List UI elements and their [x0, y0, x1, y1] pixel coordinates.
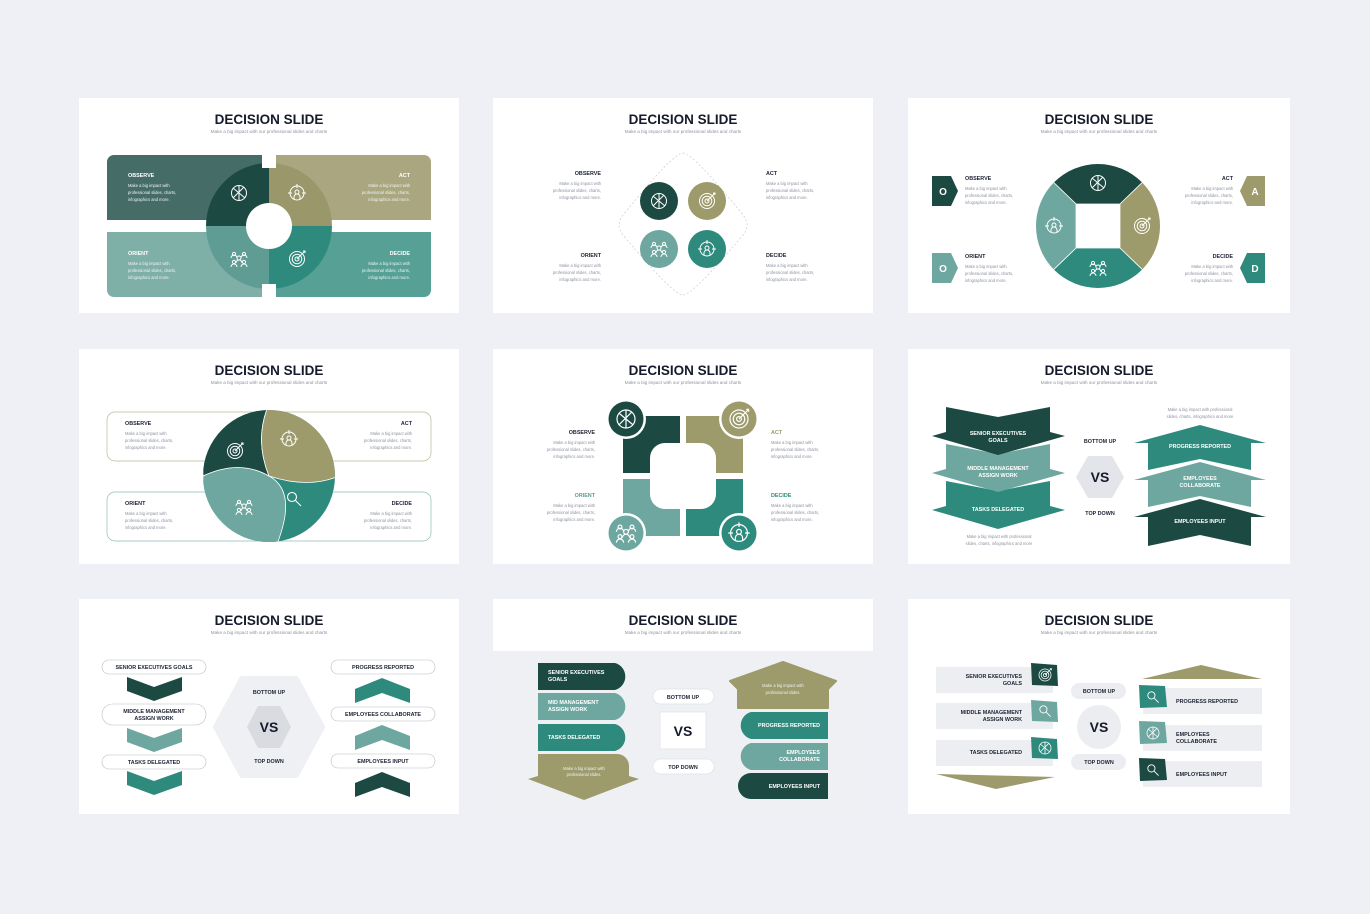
text: observe: [965, 176, 1013, 205]
panel: observe box: Make a big impact with: [128, 183, 170, 188]
left down chevrons: ASSIGN WORK: [978, 473, 1018, 479]
text: act: Make a big impact with: [370, 431, 413, 436]
outline boxes: [107, 412, 431, 541]
left stack: TASKS DELEGATED: [548, 735, 600, 741]
left boxes: GOALS: [1003, 681, 1022, 687]
vs hexagons: TOP DOWN: [254, 759, 284, 765]
text: orient: professional slides, charts,: [547, 510, 595, 515]
right up arrows: EMPLOYEES INPUT: [1174, 519, 1226, 525]
left pills: [102, 660, 206, 769]
text: act: infographics and more.: [771, 454, 813, 459]
dashed diamond: [619, 153, 747, 295]
tag: O orient: [932, 253, 958, 283]
text: decide: Make a big impact with: [771, 503, 813, 508]
panel: act box: ACT: [399, 173, 411, 179]
text: decide: professional slides, charts,: [1185, 271, 1233, 276]
vs center: [1071, 683, 1126, 770]
slide 8: boxes with arrows: [493, 599, 873, 814]
subtitle: Make a big impact with our professional slides and charts: [1041, 630, 1158, 635]
text: decide: DECIDE: [766, 253, 787, 259]
text: observe: Make a big impact with: [125, 431, 167, 436]
panel: observe box: professional slides, charts,: [128, 190, 176, 195]
text: decide: DECIDE: [1213, 254, 1233, 260]
text: left note: slides, charts, infographics and more: [966, 541, 1033, 546]
text: observe: [125, 421, 173, 450]
left stack: MID MANAGEMENT: [548, 700, 599, 706]
slide 5: square frame: [493, 349, 873, 564]
right labels and chevrons: PROGRESS REPORTED: [352, 665, 414, 671]
text: act: [766, 171, 814, 200]
text: act: professional slides, charts,: [766, 188, 814, 193]
subtitle: Make a big impact with our professional slides and charts: [625, 129, 742, 134]
text: orient: infographics and more.: [559, 277, 601, 282]
text: act: Make a big impact with: [771, 440, 813, 445]
text: orient: Make a big impact with: [559, 263, 602, 268]
right stack: EMPLOYEES: [786, 750, 820, 756]
panel: observe box: OBSERVE: [128, 173, 155, 179]
text: observe: infographics and more.: [559, 195, 601, 200]
text: act: [1185, 176, 1234, 205]
text: decide: infographics and more.: [1191, 278, 1233, 283]
vs center: VS: [1090, 719, 1108, 735]
text: decide: [364, 501, 413, 530]
left labels and chevrons: ASSIGN WORK: [134, 716, 174, 722]
left boxes: MIDDLE MANAGEMENT: [961, 710, 1023, 716]
text: act: [364, 421, 413, 450]
title: DECISION SLIDE: [215, 112, 323, 127]
tag: A: A: [1251, 187, 1259, 198]
vs center: [653, 689, 714, 774]
icons: [1045, 176, 1150, 276]
icon circles: [640, 182, 726, 268]
text: observe: OBSERVE: [575, 171, 601, 177]
subtitle: Make a big impact with our professional slides and charts: [211, 129, 328, 134]
text: observe: professional slides, charts,: [547, 447, 595, 452]
left down chevrons: TASKS DELEGATED: [972, 507, 1024, 513]
vs center: VS: [674, 723, 692, 739]
text: observe: OBSERVE: [569, 430, 595, 436]
text: decide: [766, 253, 814, 282]
left down chevrons: MIDDLE MANAGEMENT: [967, 466, 1029, 472]
panel: observe box: infographics and more.: [128, 197, 170, 202]
vs center: TOP DOWN: [668, 765, 698, 771]
text: right note: slides, charts, infographics and more: [1167, 414, 1234, 419]
text: observe: infographics and more.: [125, 445, 167, 450]
title: DECISION SLIDE: [629, 112, 737, 127]
vs hexagons: [216, 679, 322, 775]
text: decide: professional slides, charts,: [766, 270, 814, 275]
left stack: [528, 663, 639, 800]
title: DECISION SLIDE: [629, 363, 737, 378]
panel: decide box: [276, 232, 431, 297]
panel: act box: professional slides, charts,: [362, 190, 410, 195]
vs hexagons: VS: [260, 719, 278, 735]
text: act: professional slides, charts,: [771, 447, 819, 452]
text: observe: [547, 430, 596, 459]
right boxes: PROGRESS REPORTED: [1176, 699, 1238, 705]
text: decide: Make a big impact with: [1191, 264, 1234, 269]
text: act: ACT: [401, 421, 413, 427]
text: observe: infographics and more.: [553, 454, 595, 459]
title: DECISION SLIDE: [1045, 112, 1153, 127]
tag: O: [932, 176, 958, 206]
left stack: GOALS: [548, 677, 568, 683]
text: decide: [771, 493, 819, 522]
title: DECISION SLIDE: [629, 613, 737, 628]
left labels and chevrons: MIDDLE MANAGEMENT: [123, 709, 185, 715]
subtitle: Make a big impact with our professional slides and charts: [211, 380, 328, 385]
text: decide: professional slides, charts,: [364, 518, 412, 523]
right stack: COLLABORATE: [779, 757, 820, 763]
text: orient: infographics and more.: [965, 278, 1007, 283]
text: right note: Make a big impact with professional: [1168, 407, 1233, 412]
title: DECISION SLIDE: [215, 613, 323, 628]
right boxes: COLLABORATE: [1176, 739, 1217, 745]
text: orient: ORIENT: [575, 493, 596, 499]
text: orient: Make a big impact with: [553, 503, 596, 508]
text: decide: [1185, 254, 1234, 283]
left labels and chevrons: [116, 665, 193, 795]
right stack: Make a big impact with: [762, 683, 805, 688]
subtitle: Make a big impact with our professional slides and charts: [1041, 380, 1158, 385]
panel: act box: Make a big impact with: [368, 183, 411, 188]
panel: decide box: DECIDE: [390, 251, 410, 257]
subtitle: Make a big impact with our professional slides and charts: [211, 630, 328, 635]
panel: act box: [276, 155, 431, 220]
text: act: infographics and more.: [766, 195, 808, 200]
slide 1: quadrant ring: [79, 98, 459, 313]
text: observe: Make a big impact with: [965, 186, 1007, 191]
left boxes: ASSIGN WORK: [983, 717, 1022, 723]
text: orient: [965, 254, 1013, 283]
vs center: TOP DOWN: [1084, 760, 1114, 766]
panel: decide box: Make a big impact with: [368, 261, 411, 266]
tag: O: O: [939, 187, 947, 198]
left stack: ASSIGN WORK: [548, 707, 587, 713]
right stack: PROGRESS REPORTED: [758, 723, 820, 729]
text: act: infographics and more.: [1191, 200, 1233, 205]
text: observe: professional slides, charts,: [965, 193, 1013, 198]
text: act: ACT: [771, 430, 783, 436]
left boxes: SENIOR EXECUTIVES: [966, 674, 1022, 680]
text: orient: ORIENT: [581, 253, 602, 259]
left stack: SENIOR EXECUTIVES: [548, 670, 605, 676]
text: decide: DECIDE: [392, 501, 412, 507]
left boxes: TASKS DELEGATED: [970, 750, 1022, 756]
subtitle: Make a big impact with our professional slides and charts: [1041, 129, 1158, 134]
text: observe: professional slides, charts,: [125, 438, 173, 443]
text: orient: professional slides, charts,: [553, 270, 601, 275]
tag: O orient: O: [939, 264, 947, 275]
left labels and chevrons: TASKS DELEGATED: [128, 760, 180, 766]
chart: ring: [206, 155, 332, 297]
vs hexagon: VS: [1091, 469, 1109, 485]
panel: act box: infographics and more.: [368, 197, 410, 202]
right stack: professional slides.: [766, 690, 800, 695]
slide 6: chevron stacks: [908, 349, 1290, 564]
panel: orient box: infographics and more.: [128, 275, 170, 280]
tag: A: [1240, 176, 1265, 206]
panel: decide box: professional slides, charts,: [362, 268, 410, 273]
title: DECISION SLIDE: [1045, 363, 1153, 378]
panel: orient box: [107, 232, 262, 297]
panel: orient box: Make a big impact with: [128, 261, 170, 266]
text: observe: Make a big impact with: [553, 440, 596, 445]
text: decide: Make a big impact with: [766, 263, 808, 268]
slide 2: four circles: [493, 98, 873, 313]
panel: observe box: [107, 155, 262, 220]
panel: decide box: infographics and more.: [368, 275, 410, 280]
text: decide: infographics and more.: [370, 525, 412, 530]
vs hexagon: TOP DOWN: [1085, 511, 1115, 517]
left labels and chevrons: SENIOR EXECUTIVES GOALS: [116, 665, 193, 671]
right boxes: EMPLOYEES: [1176, 732, 1210, 738]
left down chevrons: GOALS: [988, 438, 1008, 444]
right boxes: [1139, 665, 1262, 787]
text: orient: ORIENT: [125, 501, 146, 507]
subtitle: Make a big impact with our professional slides and charts: [625, 630, 742, 635]
slide 9: grey boxes with icons: [908, 599, 1290, 814]
text: act: infographics and more.: [370, 445, 412, 450]
text: observe: OBSERVE: [965, 176, 992, 182]
chart: frame pieces: [606, 399, 759, 553]
text: observe: professional slides, charts,: [553, 188, 601, 193]
icons: [228, 430, 301, 515]
text: orient: professional slides, charts,: [125, 518, 173, 523]
text: observe: infographics and more.: [965, 200, 1007, 205]
text: decide: DECIDE: [771, 493, 792, 499]
vs center: BOTTOM UP: [667, 695, 700, 701]
left down chevrons: [932, 407, 1065, 529]
panel: orient box: ORIENT: [128, 251, 149, 257]
left boxes: [936, 663, 1058, 789]
slide 4: swirl circle: [79, 349, 459, 564]
text: orient: professional slides, charts,: [965, 271, 1013, 276]
right labels and chevrons: [345, 665, 421, 797]
text: orient: infographics and more.: [553, 517, 595, 522]
left down chevrons: SENIOR EXECUTIVES: [970, 431, 1027, 437]
vs hexagon: BOTTOM UP: [1084, 439, 1117, 445]
text: observe: OBSERVE: [125, 421, 152, 427]
text: orient: [125, 501, 173, 530]
right up arrows: COLLABORATE: [1180, 483, 1221, 489]
text: act: professional slides, charts,: [1185, 193, 1233, 198]
subtitle: Make a big impact with our professional slides and charts: [625, 380, 742, 385]
text: act: ACT: [766, 171, 778, 177]
text: decide: Make a big impact with: [370, 511, 413, 516]
vs hexagons: BOTTOM UP: [253, 690, 286, 696]
right up arrows: [1134, 425, 1266, 546]
text: orient: ORIENT: [965, 254, 986, 260]
text: decide: infographics and more.: [771, 517, 813, 522]
text: observe: Make a big impact with: [559, 181, 602, 186]
slide 7: pills and chevrons: [79, 599, 459, 814]
right up arrows: EMPLOYEES: [1183, 476, 1217, 482]
text: orient: infographics and more.: [125, 525, 167, 530]
panel: orient box: professional slides, charts,: [128, 268, 176, 273]
text: act: Make a big impact with: [1191, 186, 1234, 191]
text: act: professional slides, charts,: [364, 438, 412, 443]
text: decide: infographics and more.: [766, 277, 808, 282]
text: act: ACT: [1222, 176, 1234, 182]
right stack: [730, 662, 836, 799]
text: orient: Make a big impact with: [965, 264, 1007, 269]
right stack: EMPLOYEES INPUT: [769, 784, 821, 790]
text: left note: [966, 534, 1033, 546]
text: decide: professional slides, charts,: [771, 510, 819, 515]
right labels and chevrons: EMPLOYEES COLLABORATE: [345, 712, 421, 718]
text: act: [771, 430, 819, 459]
title: DECISION SLIDE: [215, 363, 323, 378]
right boxes: EMPLOYEES INPUT: [1176, 772, 1228, 778]
left stack: Make a big impact with: [563, 766, 606, 771]
vs hexagon: [1076, 439, 1124, 517]
text: act: Make a big impact with: [766, 181, 808, 186]
right pills: [331, 660, 435, 768]
text: observe: [553, 171, 602, 200]
text: orient: [547, 493, 596, 522]
right up arrows: PROGRESS REPORTED: [1169, 444, 1231, 450]
tag: D: D: [1251, 264, 1259, 275]
left stack: professional slides.: [567, 772, 601, 777]
text: orient: Make a big impact with: [125, 511, 167, 516]
slide 3: octagon: [908, 98, 1290, 313]
title: DECISION SLIDE: [1045, 613, 1153, 628]
text: left note: Make a big impact with professional: [967, 534, 1032, 539]
grey band: [493, 651, 873, 814]
tag: D: [1240, 253, 1265, 283]
text: orient: [553, 253, 602, 282]
right labels and chevrons: EMPLOYEES INPUT: [357, 759, 409, 765]
text: right note: [1167, 407, 1234, 419]
chart: octagon segments: [1036, 164, 1160, 288]
vs center: BOTTOM UP: [1083, 689, 1116, 695]
chart: circle: [203, 410, 335, 542]
